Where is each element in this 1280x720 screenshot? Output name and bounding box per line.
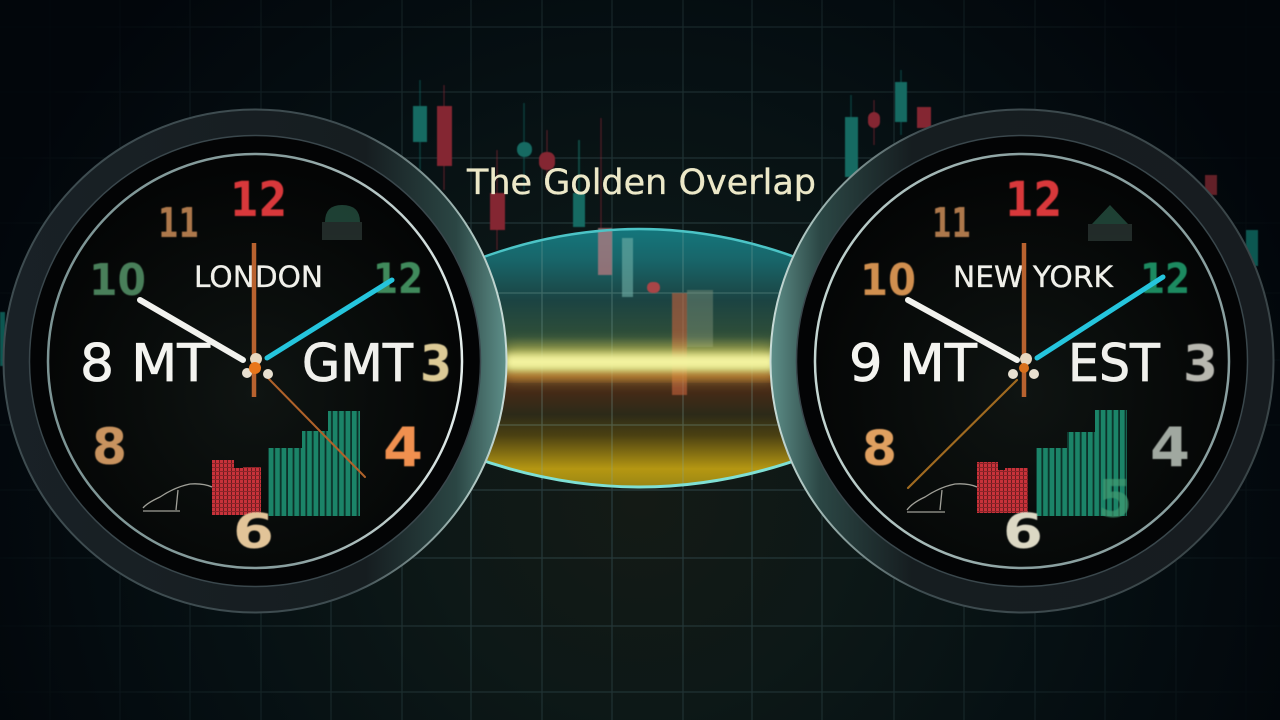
bar chart: red and green volume xyxy=(212,411,360,516)
bar chart: red and green volume xyxy=(977,410,1127,516)
clock numerals: 12 xyxy=(230,172,287,228)
city label: London: LONDON xyxy=(194,260,323,294)
icon: market building xyxy=(1088,205,1132,241)
clock numerals xyxy=(860,172,1218,560)
clock numerals: 6 xyxy=(1003,504,1043,560)
local time: 9 MT: 9 MT xyxy=(849,334,977,394)
clock numerals: 11 xyxy=(932,199,971,247)
clock rim xyxy=(3,109,507,613)
clock numerals: 3 xyxy=(420,335,452,393)
clock numerals: 8 xyxy=(862,421,897,477)
clock rim xyxy=(770,109,1274,613)
icon: market building xyxy=(322,205,362,240)
clock numerals: 6 xyxy=(233,504,274,560)
panel: London clock xyxy=(3,109,507,613)
time zone: EST: EST xyxy=(1068,334,1160,394)
clock numerals: 3 xyxy=(1183,335,1218,393)
clock numerals: 12 xyxy=(1005,172,1062,228)
clock numerals: 4 xyxy=(1150,416,1190,479)
clock numerals: 4 xyxy=(383,416,423,479)
clock numerals: 12 xyxy=(1140,254,1190,303)
icon: bridge sketch xyxy=(143,484,212,511)
clock numerals: 10 xyxy=(89,255,146,306)
local time: 8 MT: 8 MT xyxy=(80,334,210,394)
clock hands xyxy=(908,243,1163,488)
clock numerals: 8 xyxy=(92,418,127,476)
candles inside the lens xyxy=(598,228,713,395)
candlestick chart behind the title xyxy=(0,70,1258,366)
clock numerals: 5 xyxy=(1098,470,1132,530)
clock numerals: 11 xyxy=(158,199,199,247)
panel: New York clock xyxy=(770,109,1274,613)
title: The Golden Overlap xyxy=(466,163,816,203)
clock numerals: 12 xyxy=(373,254,423,303)
clock hands xyxy=(140,243,392,477)
golden glow band xyxy=(505,345,775,379)
lens outline xyxy=(470,229,808,262)
city label: New York: NEW YORK xyxy=(953,260,1114,294)
time zone: GMT: GMT xyxy=(302,334,413,394)
clock numerals xyxy=(89,172,452,560)
clock numerals: 10 xyxy=(860,255,916,306)
icon: bridge sketch xyxy=(907,484,977,512)
overlap lens between the clocks xyxy=(470,228,808,487)
